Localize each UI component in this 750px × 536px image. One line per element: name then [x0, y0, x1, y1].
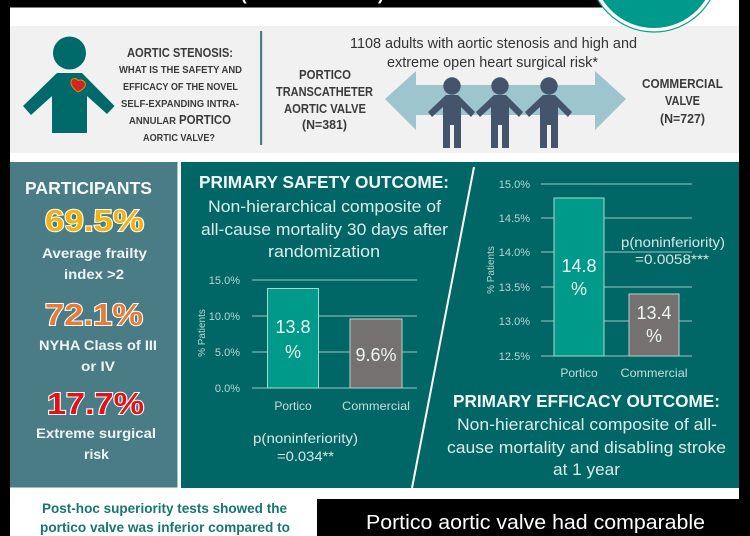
title remnant: [241, 0, 384, 4]
stat: NYHA class: 72.1%: [45, 297, 143, 332]
text: portico valve arm: [276, 68, 373, 132]
heading: primary efficacy outcome: at 1 year: [553, 460, 620, 479]
heading: primary efficacy outcome: [447, 391, 726, 479]
icon: three people: [428, 77, 572, 148]
bar chart: efficacy outcome: %: [571, 279, 587, 299]
text: portico valve arm: (N=381): [302, 118, 347, 132]
heading: primary safety outcome: PRIMARY SAFETY OUTCOME:: [199, 172, 449, 192]
bar chart: safety outcome: [197, 275, 417, 413]
bar chart: efficacy outcome: Commercial: [620, 366, 688, 380]
text: research question: PORTICO: [179, 112, 231, 127]
bar chart: efficacy outcome: 14.0%: [499, 247, 530, 259]
bar chart: safety outcome: Commercial: [342, 399, 410, 413]
stat: surgical risk: 17.7%: [47, 386, 144, 421]
stat: NYHA class: or IV: [81, 358, 116, 374]
heading: primary efficacy outcome: cause mortality and disabling stroke: [447, 438, 726, 457]
text: population description: [350, 35, 637, 71]
heading: primary efficacy outcome: Non-hierarchical composite of all-: [457, 415, 717, 434]
panel: study overview: [10, 26, 739, 153]
text: efficacy p value: =0.0058***: [635, 251, 710, 267]
bar chart: safety outcome: %: [285, 342, 301, 362]
stat: frailty: [42, 203, 147, 282]
arrow: randomization double arrow: [385, 71, 626, 130]
text: commercial valve arm: [642, 77, 723, 126]
text: research question: [119, 46, 242, 144]
panel: outcomes: [181, 162, 739, 488]
text: population description: extreme open heart surgical risk*: [387, 54, 598, 71]
text: efficacy p value: p(noninferiority): [621, 234, 725, 250]
bar chart: efficacy outcome: 13.4: [636, 303, 672, 323]
text: population description: 1108 adults with aortic stenosis and high and: [350, 35, 637, 52]
text: portico valve arm: PORTICO: [299, 68, 351, 82]
bar chart: efficacy outcome: % Patients: [486, 246, 497, 294]
bar chart: efficacy outcome: 13.5%: [499, 282, 530, 294]
bar chart: safety outcome: 13.8: [275, 317, 311, 337]
stat: frailty: Average frailty: [42, 245, 147, 261]
bar chart: safety outcome: 10.0%: [209, 311, 240, 323]
heading: primary safety outcome: all-cause mortality 30 days after: [201, 220, 448, 239]
text: portico valve arm: TRANSCATHETER: [276, 85, 373, 99]
badge: teal circle: [589, 0, 719, 32]
panel: conclusion: Portico aortic valve had comparable: [366, 512, 705, 534]
bar chart: safety outcome: 0.0%: [215, 383, 240, 395]
heading: primary safety outcome: [199, 172, 449, 261]
text: post-hoc superiority note: Post-hoc superiority tests showed the: [42, 500, 287, 516]
panel: participants: [10, 162, 178, 488]
bar chart: efficacy outcome: 14.8: [561, 256, 597, 276]
text: research question: AORTIC VALVE?: [143, 133, 215, 144]
bar chart: efficacy outcome: Portico: [560, 366, 598, 380]
bar chart: efficacy outcome: 13.0%: [499, 316, 530, 328]
text: research question: ANNULAR: [129, 116, 177, 127]
text: commercial valve arm: COMMERCIAL: [642, 77, 723, 91]
bar chart: safety outcome: 9.6%: [355, 345, 397, 365]
text: post-hoc superiority note: portico valve was inferior compared to: [40, 519, 290, 535]
bar chart: efficacy outcome: [486, 179, 692, 380]
text: portico valve arm: AORTIC VALVE: [284, 102, 366, 116]
bar chart: efficacy outcome: 15.0%: [499, 179, 530, 191]
stat: frailty: index >2: [64, 266, 124, 282]
text: efficacy p value: [621, 234, 725, 267]
stat: surgical risk: risk: [84, 446, 109, 462]
heading: participants: PARTICIPANTS: [25, 178, 152, 198]
text: research question: AORTIC STENOSIS:: [127, 46, 233, 60]
bar chart: efficacy outcome: 12.5%: [499, 351, 530, 363]
bar chart: safety outcome: Portico: [274, 399, 312, 413]
bar chart: efficacy outcome: 14.5%: [499, 213, 530, 225]
bar chart: efficacy outcome: %: [646, 326, 662, 346]
stat: surgical risk: [36, 386, 156, 462]
heading: primary safety outcome: Non-hierarchical composite of: [208, 197, 441, 216]
bar chart: safety outcome: 15.0%: [209, 275, 240, 287]
bar chart: safety outcome: % Patients: [197, 309, 208, 357]
heading: primary safety outcome: randomization: [268, 242, 380, 261]
icon: patient with heart: [23, 36, 114, 133]
text: safety p value: [253, 430, 358, 464]
stat: NYHA class: [39, 297, 157, 374]
text: post-hoc superiority note: [40, 500, 290, 535]
text: commercial valve arm: VALVE: [665, 94, 700, 108]
text: research question: EFFICACY OF THE NOVEL: [123, 82, 238, 93]
text: safety p value: p(noninferiority): [253, 430, 358, 446]
bar chart: safety outcome: 5.0%: [215, 347, 240, 359]
heading: primary efficacy outcome: PRIMARY EFFICACY OUTCOME:: [453, 391, 720, 411]
text: research question: SELF-EXPANDING INTRA-: [121, 99, 239, 110]
text: commercial valve arm: (N=727): [660, 112, 705, 126]
text: research question: WHAT IS THE SAFETY AND: [119, 65, 242, 76]
text: safety p value: =0.034**: [277, 448, 335, 464]
panel: conclusion: [317, 499, 750, 536]
stat: NYHA class: NYHA Class of III: [39, 337, 157, 353]
stat: surgical risk: Extreme surgical: [36, 425, 156, 441]
stat: frailty: 69.5%: [45, 203, 144, 238]
